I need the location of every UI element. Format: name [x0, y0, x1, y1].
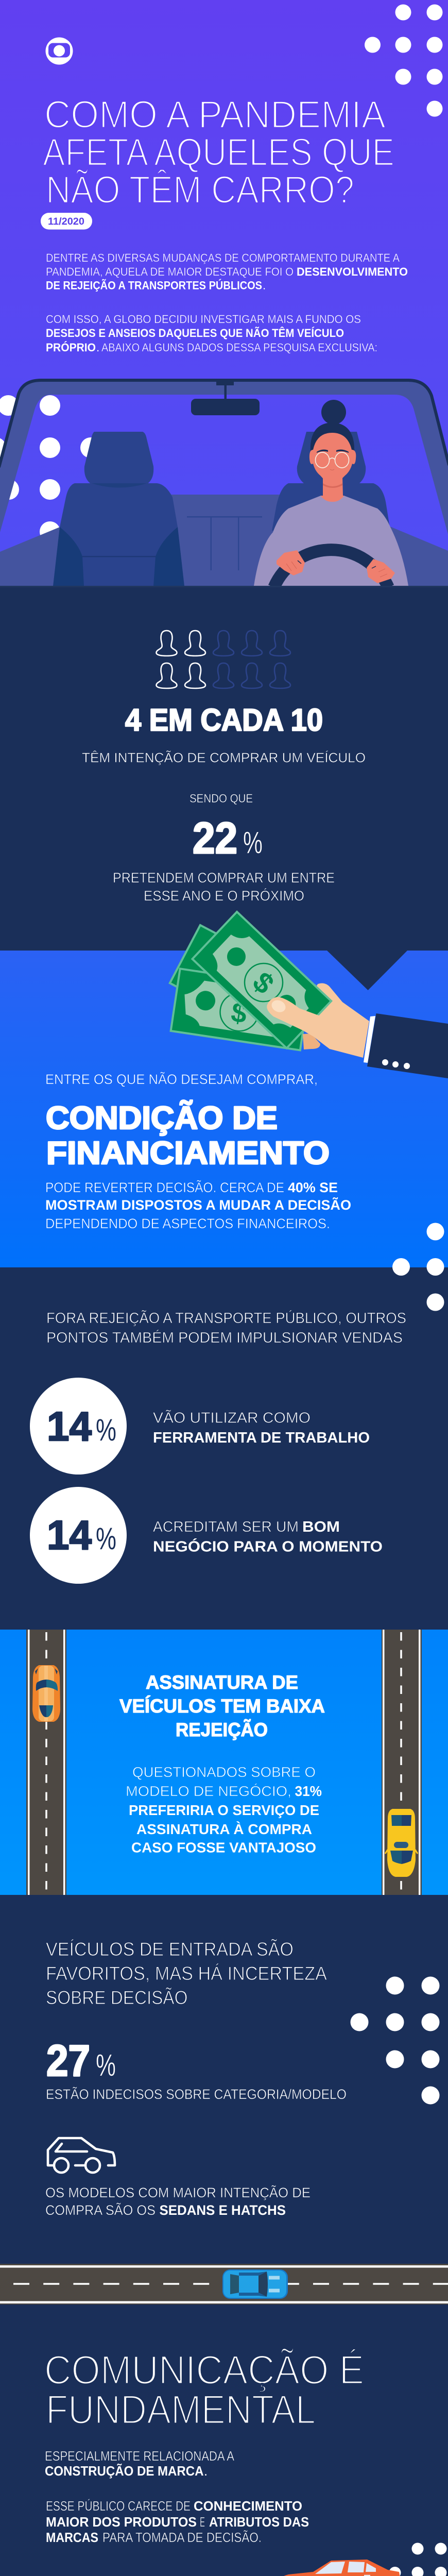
text: good deal [153, 1519, 383, 1555]
dashboard edge [0, 586, 448, 587]
stat: 22% [193, 814, 263, 863]
decorative dots right [350, 1976, 440, 2104]
road: horizontal [0, 2264, 448, 2304]
decorative dots behind windshield [0, 395, 101, 542]
icon: orange car [32, 1665, 60, 1722]
text block: financing detail [45, 1179, 351, 1231]
text block: intro paragraph 1: DESENVOLVIMENTO [297, 265, 408, 278]
thumb nail [270, 998, 287, 1014]
heading: veiculos de entrada: SOBRE DECISÃO [46, 1987, 187, 2008]
stat circle: 14% good deal [30, 1487, 127, 1584]
text: plan to buy [113, 870, 335, 904]
car interior back wall [0, 495, 448, 586]
heading: assinatura: ASSINATURA DE [146, 1672, 298, 1693]
icon array: 4 in 10 people [157, 631, 290, 688]
text: sendo que: SENDO QUE [189, 791, 253, 805]
middle bill [169, 968, 311, 1052]
stat circle: 14% work tool [30, 1378, 127, 1475]
road: right vertical [382, 1630, 422, 1895]
text: indecisos: ESTÃO INDECISOS SOBRE CATEGORIA/MODELO [46, 2086, 347, 2102]
stat: 22%: % [243, 825, 263, 860]
text: public needs knowledge: ESSE PÚBLICO CARECE DE [46, 2499, 191, 2514]
text: work tool: FERRAMENTA DE TRABALHO [153, 1430, 370, 1446]
hand behind bills [309, 983, 369, 1058]
text: public needs knowledge: ATRIBUTOS DAS [209, 2515, 309, 2530]
rear-view mirror [191, 382, 260, 415]
stat: 22%: 22 [193, 814, 237, 863]
heading: condicao de financiamento [46, 1100, 330, 1171]
decorative dots top right [365, 4, 443, 116]
text: intention to buy: TÊM INTENÇÃO DE COMPRAR UM VEÍCULO [82, 750, 366, 766]
text block: intro paragraph 1: . [263, 279, 266, 292]
red car [275, 2560, 402, 2576]
text: brand construction: ESPECIALMENTE RELACIONADA A [45, 2449, 234, 2464]
heading: veiculos de entrada: VEÍCULOS DE ENTRADA SÃO [46, 1939, 294, 1960]
icon: car outline [48, 2138, 115, 2173]
text: sedans e hatchs: SEDANS E HATCHS [160, 2202, 286, 2218]
heading: veiculos de entrada [46, 1939, 327, 2008]
panel: entry vehicles and communication background [0, 1895, 448, 2576]
text: entre os que nao desejam comprar: ENTRE OS QUE NÃO DESEJAM COMPRAR, [45, 1071, 318, 1087]
jacket sleeve [367, 1013, 448, 1078]
title: AFETA AQUELES QUE [43, 130, 394, 174]
heading: fora rejeicao: PONTOS TAMBÉM PODEM IMPULSIONAR VENDAS [46, 1329, 403, 1346]
notch arrow [327, 951, 407, 990]
stat circle: 14% good deal: % [96, 1521, 116, 1556]
text block: financing detail: 40% SE [288, 1180, 338, 1195]
text: good deal: ACREDITAM SER UM [153, 1519, 299, 1535]
text: sedans e hatchs: OS MODELOS COM MAIOR INTENÇÃO DE [45, 2184, 311, 2200]
text: work tool: VÃO UTILIZAR COMO [153, 1409, 311, 1426]
text: brand construction: . [204, 2464, 208, 2479]
text block: subscription detail: 31% [295, 1783, 322, 1799]
text block: subscription detail: MODELO DE NEGÓCIO, [126, 1783, 291, 1799]
text block: subscription detail: QUESTIONADOS SOBRE O [132, 1764, 316, 1780]
stat: 27%: % [96, 2048, 116, 2082]
stat circle: 14% good deal: 14 [47, 1512, 92, 1558]
heading: comunicacao e fundamental: COMUNICAÇÃO É [44, 2347, 364, 2393]
icon: blue car [222, 2269, 288, 2299]
heading: condicao de financiamento: FINANCIAMENTO [46, 1136, 330, 1171]
text: plan to buy: PRETENDEM COMPRAR UM ENTRE [113, 870, 335, 886]
text: plan to buy: ESSE ANO E O PRÓXIMO [144, 888, 304, 904]
shirt cuff [364, 1016, 375, 1063]
decorative dots bottom right [389, 2543, 447, 2576]
middle bill: $ [229, 996, 249, 1029]
heading: assinatura: REJEIÇÃO [176, 1719, 268, 1740]
illustration: woman driving seen through windshield [0, 379, 448, 587]
front bill [191, 910, 333, 1049]
text: public needs knowledge: MAIOR DOS PRODUTOS [46, 2515, 197, 2530]
center console [187, 516, 262, 570]
text block: subscription detail [126, 1764, 322, 1856]
driver seat [272, 432, 390, 531]
text: work tool [153, 1409, 370, 1446]
text block: subscription detail: ASSINATURA À COMPRA [136, 1821, 312, 1837]
icon: globo logo [45, 37, 73, 65]
text block: intro paragraph 2: ABAIXO ALGUNS DADOS DESSA PESQUISA EXCLUSIVA: [101, 341, 377, 354]
text block: intro paragraph 2: DESEJOS E ANSEIOS DAQUELES QUE NÃO TÊM VEÍCULO [46, 327, 344, 340]
text block: intro paragraph 1: DE REJEIÇÃO A TRANSPORTES PÚBLICOS [46, 279, 262, 292]
text block: financing detail: PODE REVERTER DECISÃO. CERCA DE [45, 1179, 284, 1195]
text: sedans e hatchs: COMPRA SÃO OS [45, 2202, 156, 2218]
text block: intro paragraph 2: . [96, 341, 99, 354]
heading: comunicacao e fundamental [44, 2347, 364, 2432]
text block: intro paragraph 2: COM ISSO, A GLOBO DECIDIU INVESTIGAR MAIS A FUNDO OS [46, 313, 361, 326]
thumb [267, 997, 340, 1046]
text block: intro paragraph 1: DENTRE AS DIVERSAS MUDANÇAS DE COMPORTAMENTO DURANTE A [46, 251, 400, 264]
title: COMO A PANDEMIA [44, 93, 386, 136]
steering wheel [274, 550, 388, 587]
illustration: hand holding money [168, 910, 448, 1078]
icon: yellow car [385, 1809, 418, 1877]
stat circle: 14% work tool: % [96, 1413, 116, 1447]
front bill: $ [247, 965, 281, 1000]
text block: intro paragraph 2 [46, 313, 377, 354]
text block: intro paragraph 1: PANDEMIA, AQUELA DE MAIOR DESTAQUE FOI O [46, 265, 294, 278]
text block: financing detail: MOSTRAM DISPOSTOS A MUDAR A DECISÃO [45, 1197, 351, 1213]
text: good deal: BOM [302, 1519, 340, 1535]
text: public needs knowledge: CONHECIMENTO [194, 2499, 302, 2514]
passenger seat [53, 432, 184, 586]
heading: condicao de financiamento: CONDIÇÃO DE [46, 1100, 278, 1136]
panel: hero background [0, 0, 448, 587]
text block: subscription detail: PREFERIRIA O SERVIÇO DE [129, 1802, 319, 1818]
text: public needs knowledge [46, 2499, 309, 2545]
stat: 27%: 27 [46, 2037, 90, 2086]
text block: financing detail: DEPENDENDO DE ASPECTOS FINANCEIROS. [45, 1216, 330, 1231]
text: good deal: NEGÓCIO PARA O MOMENTO [153, 1537, 383, 1555]
text: public needs knowledge: PARA TOMADA DE DECISÃO. [102, 2530, 262, 2545]
heading: assinatura: VEÍCULOS TEM BAIXA [119, 1696, 325, 1717]
text: public needs knowledge: E [200, 2515, 205, 2530]
heading: assinatura [119, 1672, 325, 1740]
panel: subscription background [0, 1630, 448, 1895]
decorative dots section boundary [392, 1223, 444, 1311]
heading: fora rejeicao: FORA REJEIÇÃO A TRANSPORTE PÚBLICO, OUTROS [46, 1309, 406, 1327]
text: brand construction: CONSTRUÇÃO DE MARCA [45, 2463, 204, 2479]
hands [277, 550, 395, 583]
text block: intro paragraph 2: PRÓPRIO [46, 341, 96, 354]
stat: 4 em cada 10: 4 EM CADA 10 [125, 703, 323, 737]
panel: financing background [0, 951, 448, 1267]
text: brand construction [45, 2449, 234, 2479]
heading: fora rejeicao [46, 1309, 406, 1346]
driver body [254, 400, 408, 586]
title [43, 93, 394, 211]
date badge: 11/2020 [48, 216, 84, 227]
text: sedans e hatchs [45, 2184, 311, 2218]
title: NÃO TÊM CARRO? [46, 168, 354, 211]
sleeve buttons [382, 1059, 410, 1069]
panel: other motivators background [0, 1267, 448, 1630]
date badge [41, 213, 92, 230]
text: public needs knowledge: MARCAS [46, 2531, 98, 2545]
text block: intro paragraph 1 [46, 251, 408, 292]
windshield frame [0, 379, 448, 534]
road: left vertical [26, 1630, 66, 1895]
heading: comunicacao e fundamental: FUNDAMENTAL [46, 2386, 316, 2432]
heading: veiculos de entrada: FAVORITOS, MAS HÁ INCERTEZA [46, 1963, 327, 1984]
text block: subscription detail: CASO FOSSE VANTAJOSO [131, 1839, 316, 1856]
fingers under bills [303, 1033, 320, 1049]
panel: dark stats background [0, 586, 448, 951]
illustration: hand with red car and keys [266, 2560, 448, 2576]
back bill [168, 924, 317, 1045]
stat circle: 14% work tool: 14 [47, 1403, 92, 1449]
